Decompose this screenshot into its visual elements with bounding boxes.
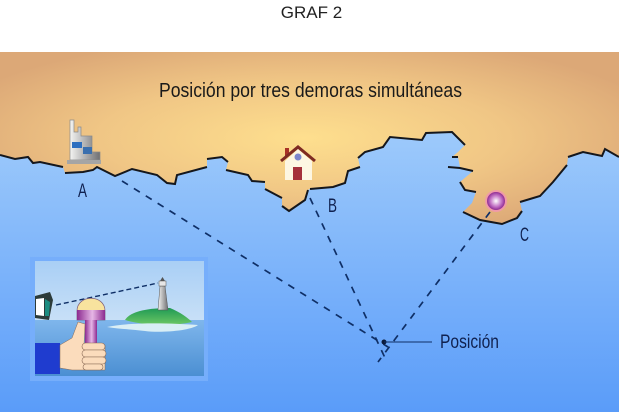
map heading: Posición por tres demoras simultáneas	[159, 80, 462, 102]
label B: B	[328, 196, 337, 217]
position label: Posición	[440, 332, 499, 353]
land with coastline	[0, 52, 619, 224]
island	[125, 308, 192, 325]
sight line	[56, 283, 158, 305]
label C: C	[520, 225, 529, 246]
title: GRAF 2	[281, 3, 342, 22]
label A: A	[78, 181, 87, 202]
compass	[77, 298, 105, 370]
icon: factory	[67, 120, 101, 164]
position marker	[382, 340, 432, 344]
hand	[35, 322, 106, 374]
inset panel: hand bearing compass	[30, 257, 208, 381]
icon: marker C	[485, 190, 507, 212]
icon: house	[281, 147, 315, 180]
foam	[107, 323, 198, 332]
sea	[0, 125, 619, 412]
lighthouse	[158, 277, 168, 310]
bearing lines	[122, 181, 490, 362]
eye	[35, 292, 53, 320]
